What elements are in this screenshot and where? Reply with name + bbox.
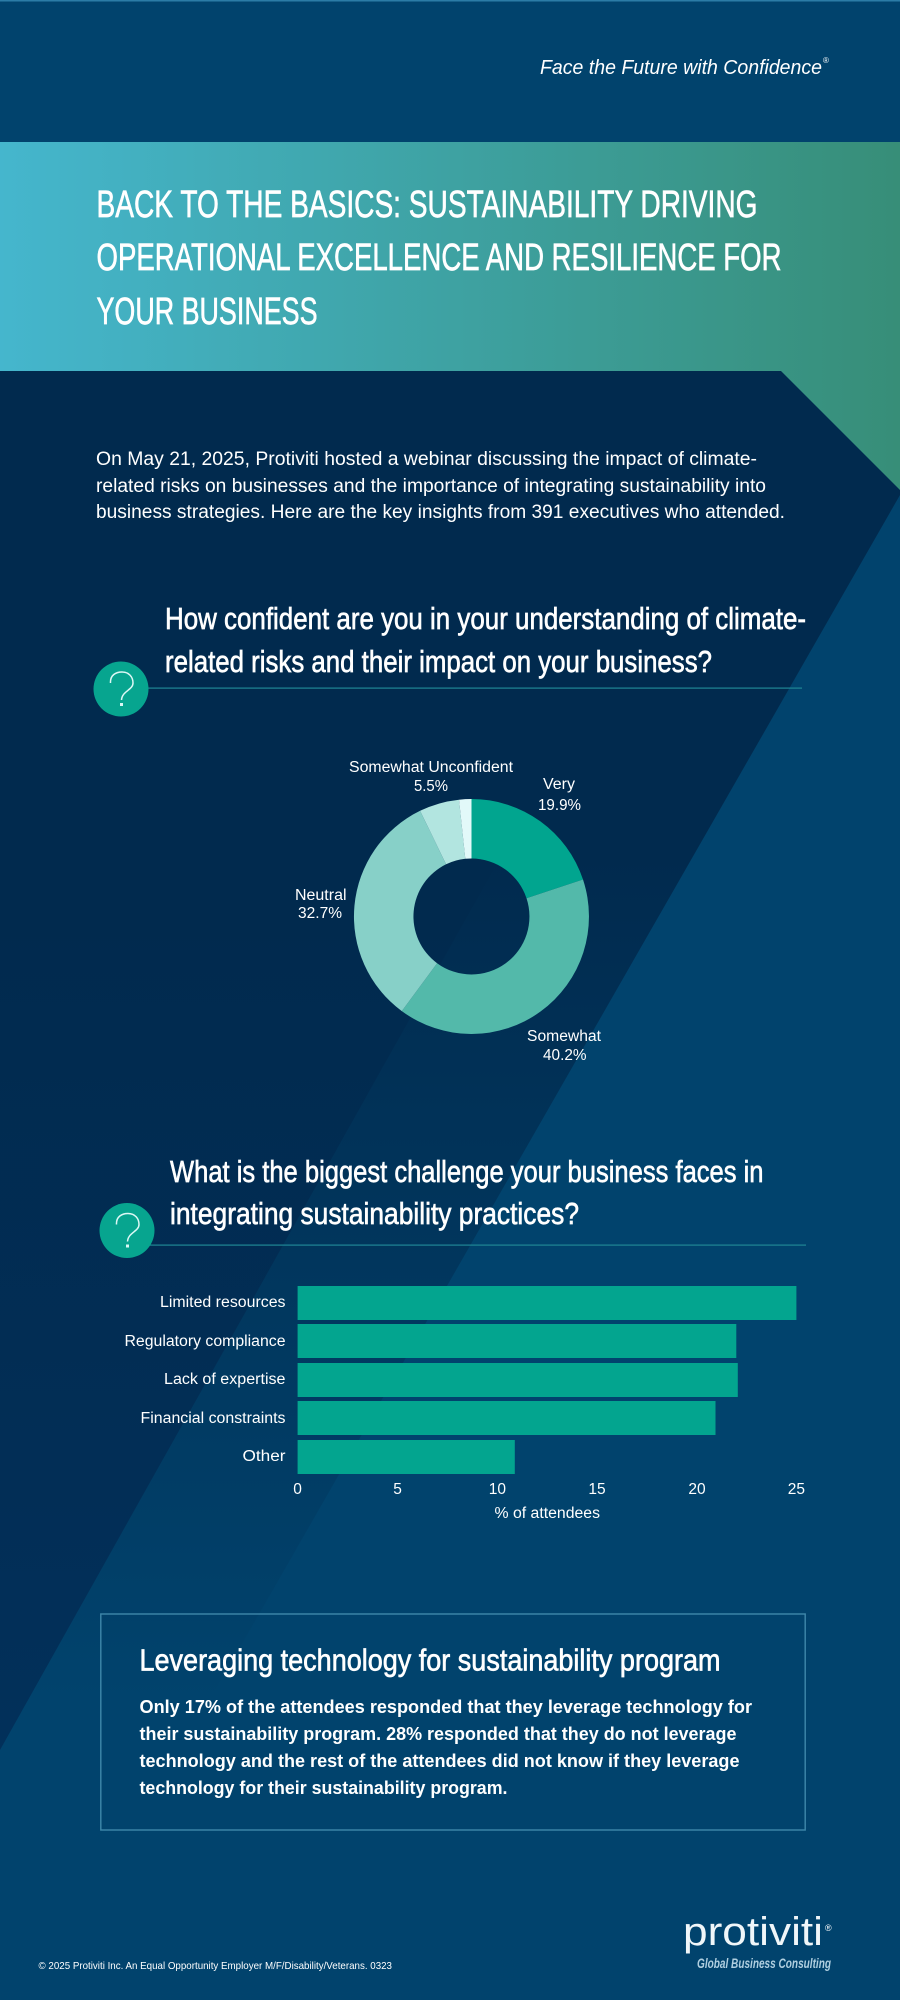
bars bbox=[298, 1286, 796, 1474]
donut labels: 40.2% bbox=[543, 1047, 587, 1064]
question 2 heading: integrating sustainability practices? bbox=[170, 1196, 579, 1231]
axis ticks bbox=[293, 1481, 805, 1498]
footer copyright: © 2025 Protiviti Inc. An Equal Opportunity Employer M/F/Disability/Veterans. 0323 bbox=[38, 1960, 392, 1972]
tagline registered mark: ® bbox=[823, 56, 829, 65]
question 2 heading: What is the biggest challenge your business faces in bbox=[170, 1154, 764, 1189]
icon: question mark 1 bbox=[94, 662, 148, 716]
panel: question 1 confidence bbox=[94, 601, 806, 1064]
axis ticks: 25 bbox=[788, 1481, 805, 1498]
intro paragraph: On May 21, 2025, Protiviti hosted a webinar discussing the impact of climate- bbox=[96, 449, 757, 470]
donut labels: Very bbox=[543, 776, 575, 793]
callout heading: Leveraging technology for sustainability program bbox=[140, 1642, 720, 1678]
slice: somewhat unconfident bbox=[420, 800, 465, 864]
logo: protiviti: ® bbox=[825, 1923, 832, 1933]
donut labels bbox=[295, 759, 602, 1064]
axis ticks: 15 bbox=[588, 1481, 606, 1498]
slice: not confident bbox=[459, 799, 472, 859]
axis ticks: 20 bbox=[688, 1481, 706, 1498]
tagline: Face the Future with Confidence bbox=[540, 57, 822, 79]
icon: question mark 2 bbox=[100, 1203, 154, 1258]
category labels: Limited resources bbox=[160, 1294, 286, 1311]
axis ticks: 5 bbox=[393, 1481, 402, 1498]
axis ticks: 10 bbox=[489, 1481, 506, 1498]
question 1 heading: related risks and their impact on your business? bbox=[165, 644, 712, 679]
donut chart bbox=[354, 799, 589, 1034]
callout: leveraging technology bbox=[101, 1614, 805, 1830]
donut labels: Neutral bbox=[295, 887, 346, 904]
slice: very bbox=[472, 799, 583, 898]
slice: neutral bbox=[354, 811, 446, 1011]
callout body bbox=[140, 1697, 752, 1798]
title: YOUR BUSINESS bbox=[96, 291, 318, 333]
donut labels: 5.5% bbox=[414, 778, 448, 795]
donut labels: 32.7% bbox=[298, 905, 342, 922]
axis title: % of attendees bbox=[494, 1505, 600, 1522]
category labels: Other bbox=[242, 1448, 286, 1465]
title banner bbox=[0, 142, 900, 490]
question 2 heading bbox=[170, 1154, 764, 1231]
intro paragraph: related risks on businesses and the importance of integrating sustainability into bbox=[96, 476, 766, 497]
callout body: Only 17% of the attendees responded that they leverage technology for bbox=[140, 1697, 752, 1717]
axis ticks: 0 bbox=[293, 1481, 302, 1498]
slice: somewhat bbox=[402, 880, 589, 1034]
category labels: Lack of expertise bbox=[164, 1371, 286, 1388]
category labels bbox=[124, 1294, 286, 1465]
logo: protiviti: protiviti bbox=[683, 1910, 823, 1954]
callout body: technology and the rest of the attendees did not know if they leverage bbox=[140, 1751, 740, 1771]
category labels: Financial constraints bbox=[140, 1410, 286, 1427]
title bbox=[96, 184, 782, 333]
question 1 heading bbox=[165, 601, 806, 679]
bar chart bbox=[124, 1286, 805, 1522]
category labels: Regulatory compliance bbox=[124, 1333, 286, 1350]
intro paragraph: business strategies. Here are the key insights from 391 executives who attended. bbox=[96, 502, 785, 523]
donut labels: 19.9% bbox=[538, 797, 581, 814]
panel: question 2 challenges bbox=[100, 1154, 806, 1522]
intro paragraph bbox=[96, 449, 785, 523]
callout body: their sustainability program. 28% responded that they do not leverage bbox=[140, 1724, 736, 1744]
donut labels: Somewhat Unconfident bbox=[349, 759, 514, 776]
logo: protiviti bbox=[683, 1910, 832, 1971]
logo: protiviti: Global Business Consulting bbox=[697, 1955, 831, 1971]
donut labels: Somewhat bbox=[527, 1028, 602, 1045]
callout body: technology for their sustainability program. bbox=[140, 1778, 508, 1798]
